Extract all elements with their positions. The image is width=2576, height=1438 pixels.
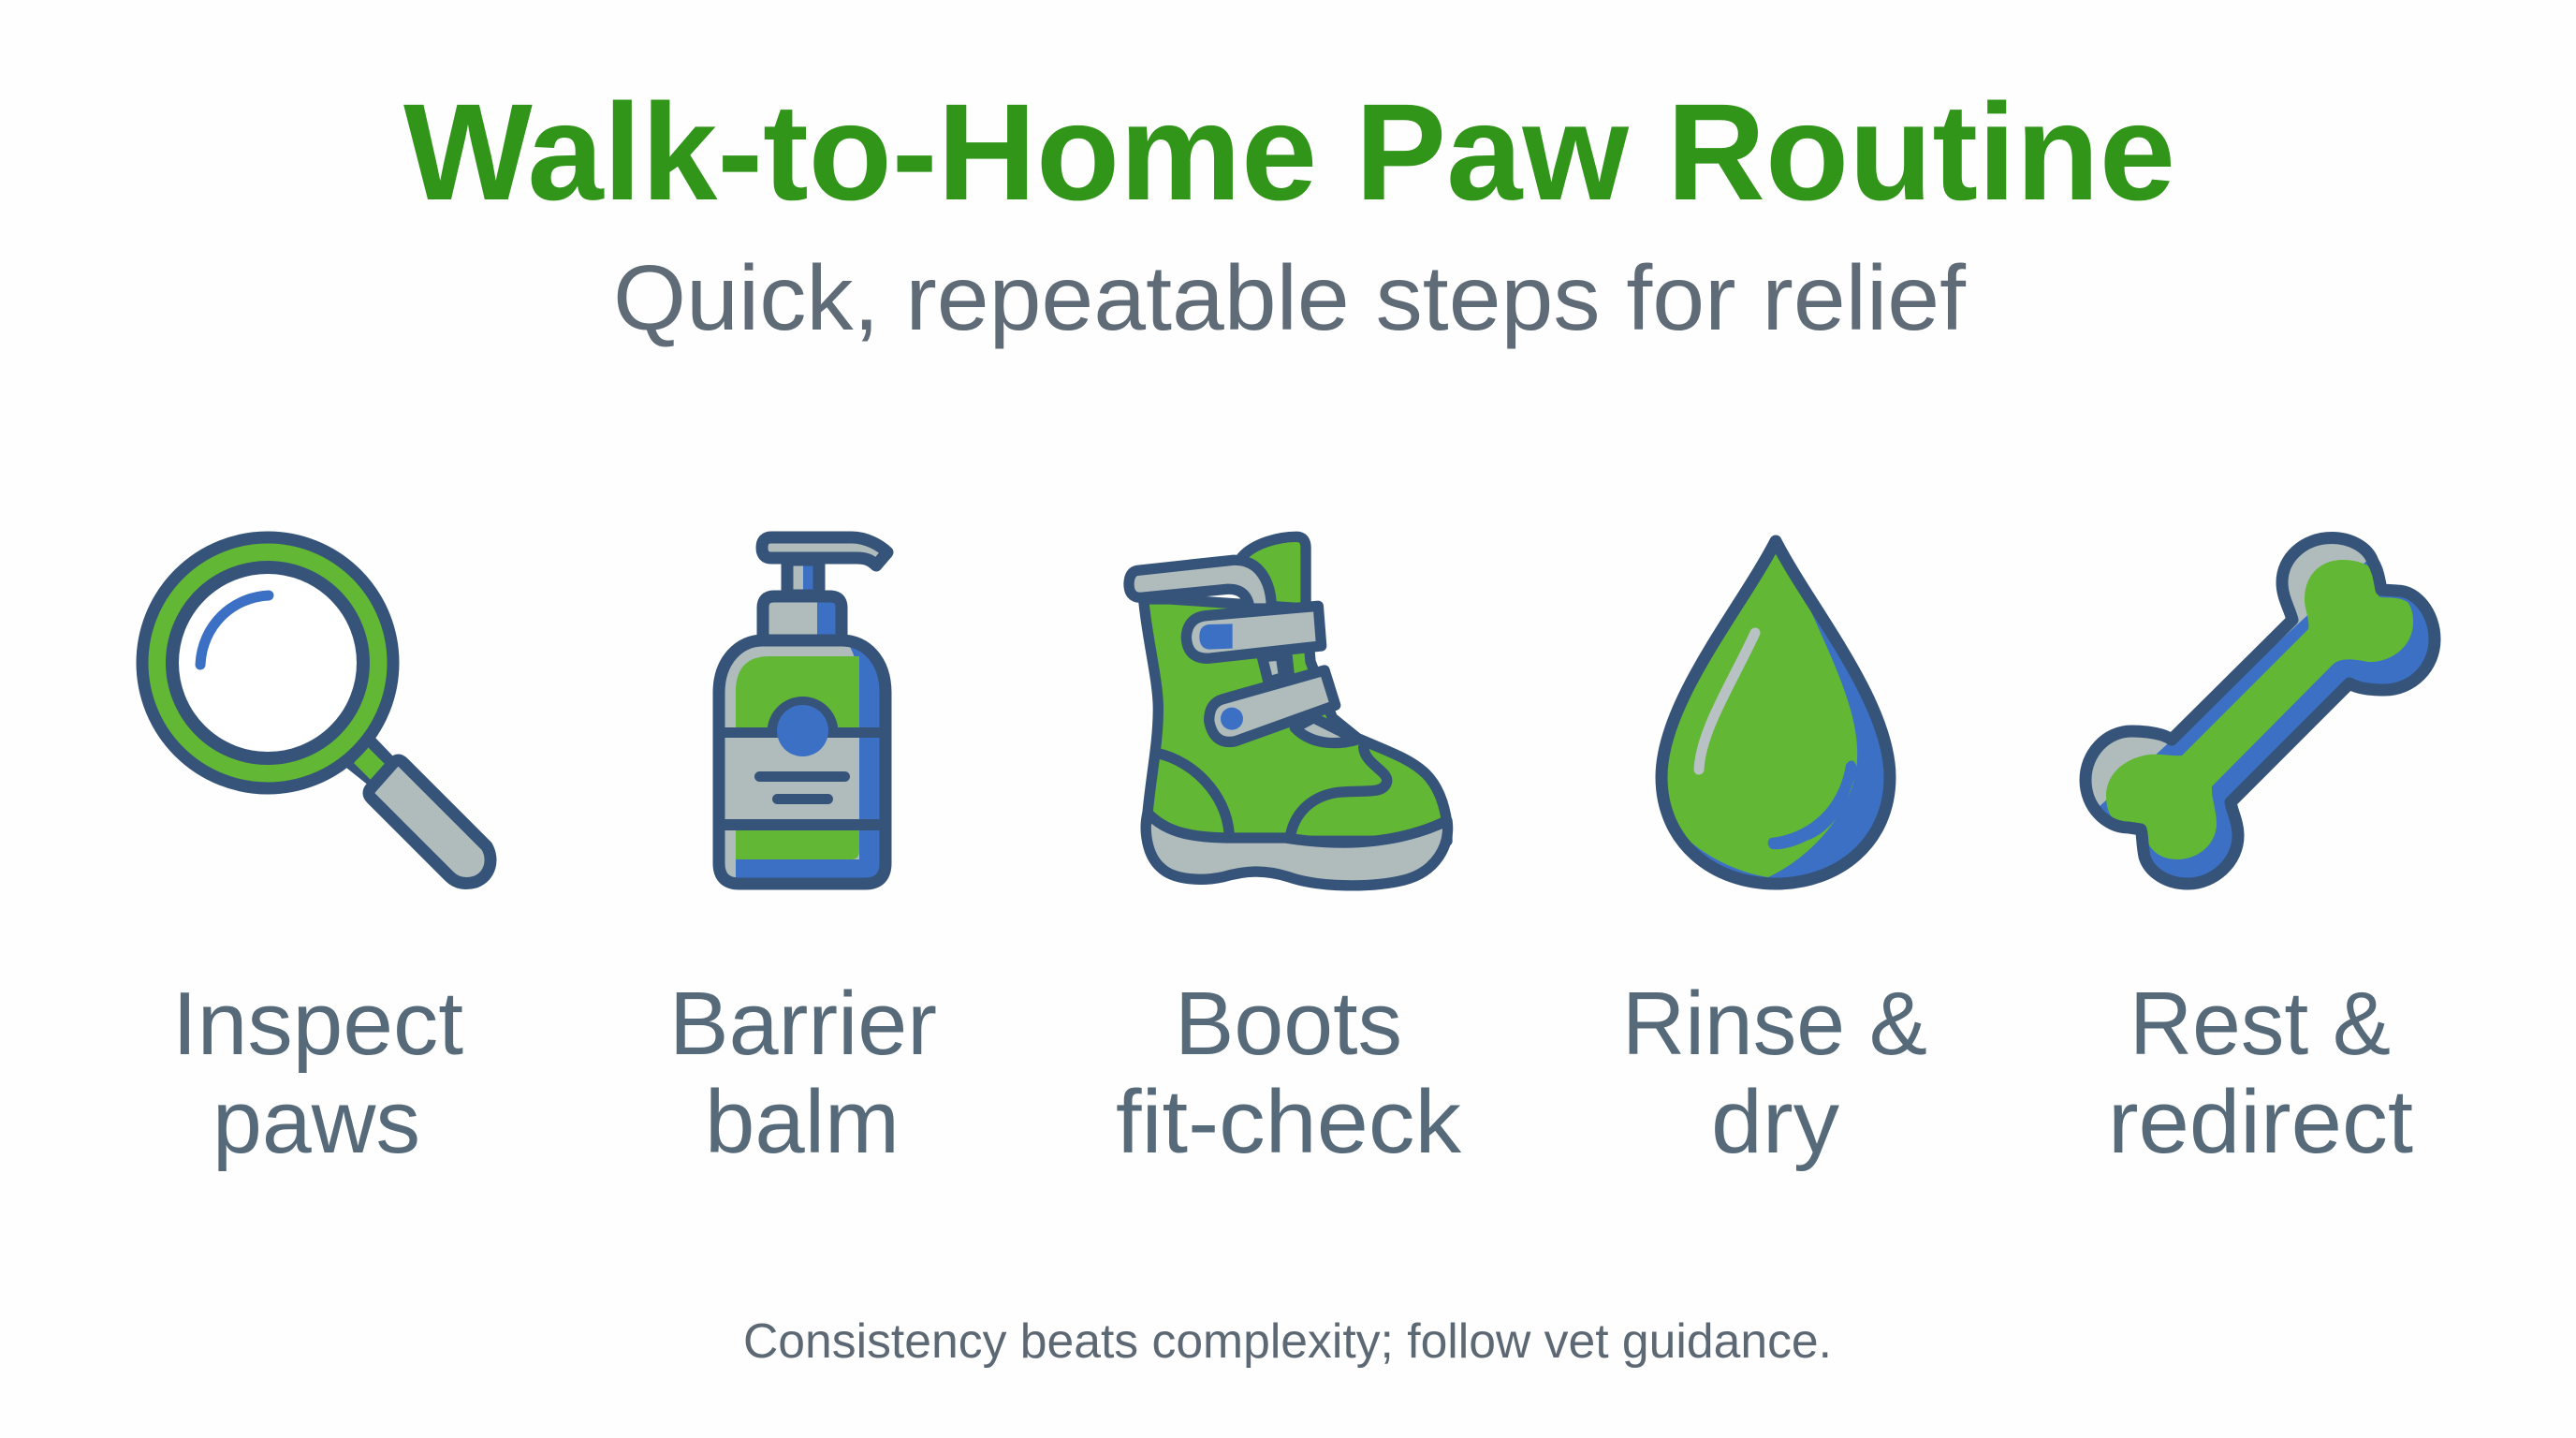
label: rest and redirect: Rest & (2130, 974, 2391, 1074)
footer note: Consistency beats complexity; follow vet guidance. (743, 1314, 1832, 1369)
collar (1129, 560, 1271, 609)
bone outline (2086, 537, 2435, 884)
pump head (762, 537, 887, 565)
lens glass (172, 567, 363, 758)
label: barrier balm: Barrier (669, 974, 937, 1074)
handle grip (369, 760, 490, 884)
icon: magnifying glass (142, 537, 490, 884)
label: rest and redirect: redirect (2108, 1072, 2413, 1172)
bottle body (711, 637, 899, 889)
label badge (768, 697, 839, 756)
title: Walk-to-Home Paw Routine (403, 76, 2175, 229)
label lines (754, 771, 850, 804)
top strap tab (1199, 624, 1233, 650)
upper (1144, 599, 1447, 841)
drop highlight (1699, 633, 1755, 770)
label: barrier balm (669, 974, 937, 1172)
top strap (1186, 606, 1322, 658)
subtitle: Quick, repeatable steps for relief (613, 246, 1967, 349)
label: rinse and dry: dry (1711, 1072, 1839, 1172)
infographic canvas (137, 99, 2441, 1368)
drop base (1690, 611, 1883, 878)
bottle neck (763, 596, 842, 640)
label: boots fit-check: Boots (1175, 974, 1402, 1074)
label: rest and redirect (2108, 974, 2413, 1172)
toe cap line (1290, 747, 1387, 836)
drop blue swoosh (1768, 760, 1857, 849)
icon: pump bottle (711, 537, 899, 889)
icon: bone (2080, 532, 2441, 889)
inner buckle strip (1262, 655, 1284, 682)
label: rinse and dry: Rinse & (1622, 974, 1927, 1074)
label: inspect paws: Inspect (172, 974, 463, 1074)
lens highlight (200, 595, 269, 665)
label: boots fit-check (1116, 974, 1462, 1172)
label: inspect paws (172, 974, 463, 1172)
label: rinse and dry (1622, 974, 1927, 1172)
bone green body (2106, 560, 2413, 859)
tongue gusset (1295, 718, 1357, 743)
label: boots fit-check: fit-check (1116, 1072, 1462, 1172)
label: barrier balm: balm (705, 1072, 900, 1172)
lower strap (1209, 670, 1336, 741)
handle connector (346, 738, 397, 786)
icon: water drop (1655, 536, 1896, 889)
lower strap rivet (1221, 708, 1243, 730)
bone blue edge (2100, 562, 2428, 878)
sole (1146, 813, 1448, 886)
icon: dog boot (1129, 536, 1448, 886)
pump stem (787, 560, 819, 595)
bone shadow base (2091, 544, 2366, 806)
heel panel line (1159, 754, 1229, 835)
back tab (1242, 536, 1306, 611)
drop green body (1668, 554, 1857, 877)
buckle divider (1287, 655, 1289, 676)
lens ring (142, 537, 393, 788)
label: inspect paws: paws (212, 1072, 420, 1172)
drop outline (1661, 541, 1890, 884)
